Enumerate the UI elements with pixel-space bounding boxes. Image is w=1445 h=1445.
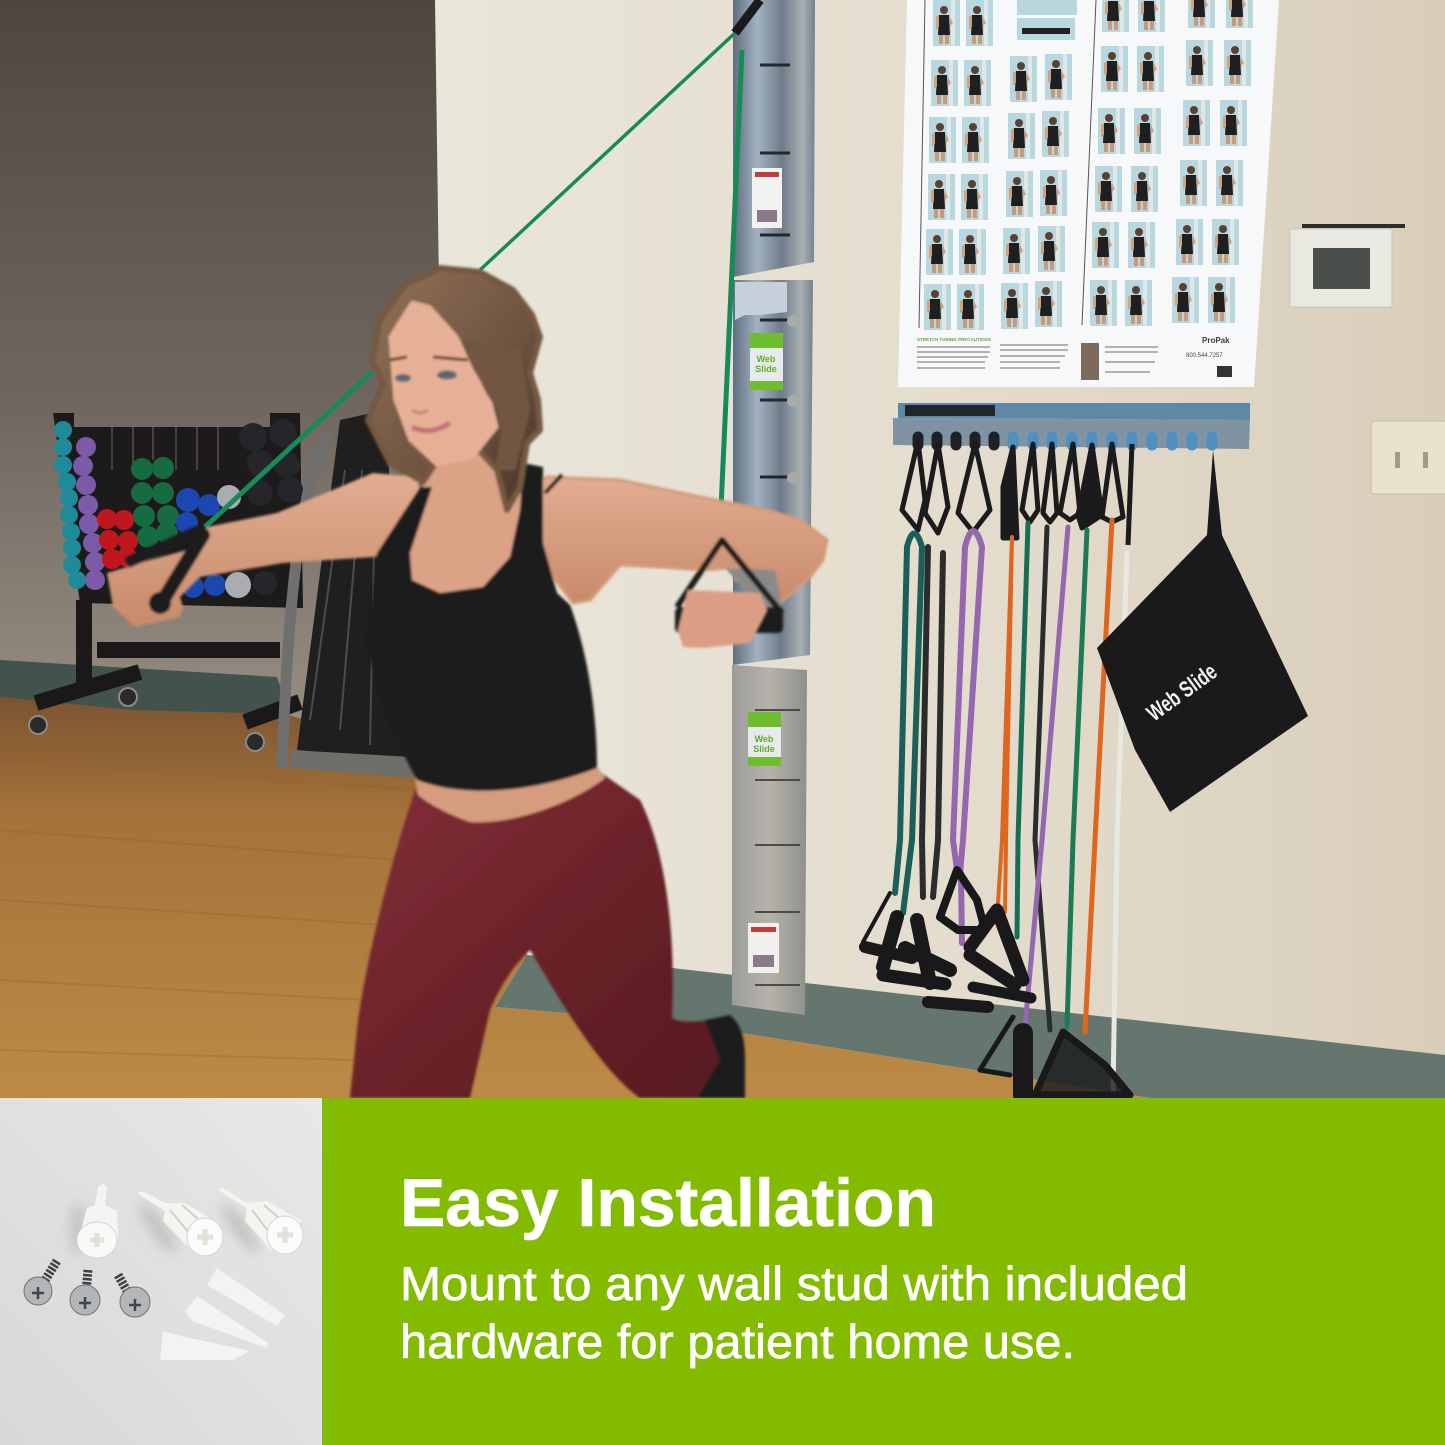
hardware photo panel xyxy=(0,1098,322,1445)
resistance bands xyxy=(895,520,1127,1093)
exercise poster: 800.544.7257 xyxy=(1186,353,1223,359)
body text: hardware for patient home use. xyxy=(400,1315,1075,1368)
far arm xyxy=(107,473,430,627)
grey dumbbells xyxy=(217,485,251,598)
woman exercising xyxy=(107,268,827,1098)
right hand grip xyxy=(675,540,783,648)
wall mount plates xyxy=(732,0,815,1015)
facial features xyxy=(390,357,468,431)
teal dumbbells xyxy=(54,421,86,589)
black storage bag: Web Slide xyxy=(1142,658,1222,726)
dumbbell rack xyxy=(29,413,303,751)
chest and neck xyxy=(400,450,545,600)
loose curl xyxy=(460,340,530,470)
resistance tubes to mount xyxy=(205,0,760,530)
black storage bag xyxy=(1097,450,1308,812)
band handles xyxy=(863,870,1130,1095)
body text xyxy=(400,1257,1188,1368)
middle plate xyxy=(733,280,813,665)
folded mat stand xyxy=(282,410,412,778)
green baseboard xyxy=(495,955,1445,1098)
red dumbbells xyxy=(97,509,138,569)
lower plate: Slide xyxy=(753,744,775,754)
green text panel xyxy=(322,1098,1445,1445)
lower plate: Web xyxy=(755,734,774,744)
purple dumbbells xyxy=(73,437,105,590)
heading: Easy Installation xyxy=(400,1165,936,1241)
near arm xyxy=(530,477,827,603)
lower plate xyxy=(732,665,807,1015)
light wall xyxy=(435,0,1445,1070)
shadows xyxy=(71,1199,264,1257)
body text: Mount to any wall stud with included xyxy=(400,1257,1188,1310)
middle plate: Slide xyxy=(755,364,777,374)
exercise poster: ProPak xyxy=(1202,336,1230,345)
face xyxy=(390,302,497,465)
teal baseboard left xyxy=(0,660,290,714)
midriff xyxy=(415,766,605,822)
wall anchor 1 xyxy=(77,1184,118,1258)
wall anchor 2 xyxy=(137,1191,223,1256)
band straps xyxy=(902,441,1132,545)
top plate xyxy=(733,0,815,277)
leggings xyxy=(350,770,722,1098)
black dumbbells xyxy=(239,419,303,595)
exercise poster xyxy=(898,0,1279,387)
hair xyxy=(368,268,540,510)
left hand grip xyxy=(127,530,203,614)
wood floor xyxy=(0,697,1150,1098)
black tank top xyxy=(366,463,597,791)
thin strap xyxy=(545,475,562,493)
thermostat xyxy=(1290,224,1405,307)
dark back wall xyxy=(0,0,446,800)
green dumbbells xyxy=(131,457,179,548)
screws xyxy=(24,1261,150,1317)
plastic plugs xyxy=(160,1268,285,1360)
middle plate: Web xyxy=(757,354,776,364)
shoe xyxy=(697,1015,745,1098)
light switch xyxy=(1371,421,1445,494)
casters xyxy=(29,688,264,751)
photo: exercise room scene xyxy=(0,0,1445,1098)
wall anchor 3 xyxy=(218,1188,303,1254)
wall hook rail xyxy=(893,403,1250,449)
blue dumbbells xyxy=(176,488,226,598)
exercise poster: STRETCH TUBING PRECAUTIONS xyxy=(917,337,991,342)
